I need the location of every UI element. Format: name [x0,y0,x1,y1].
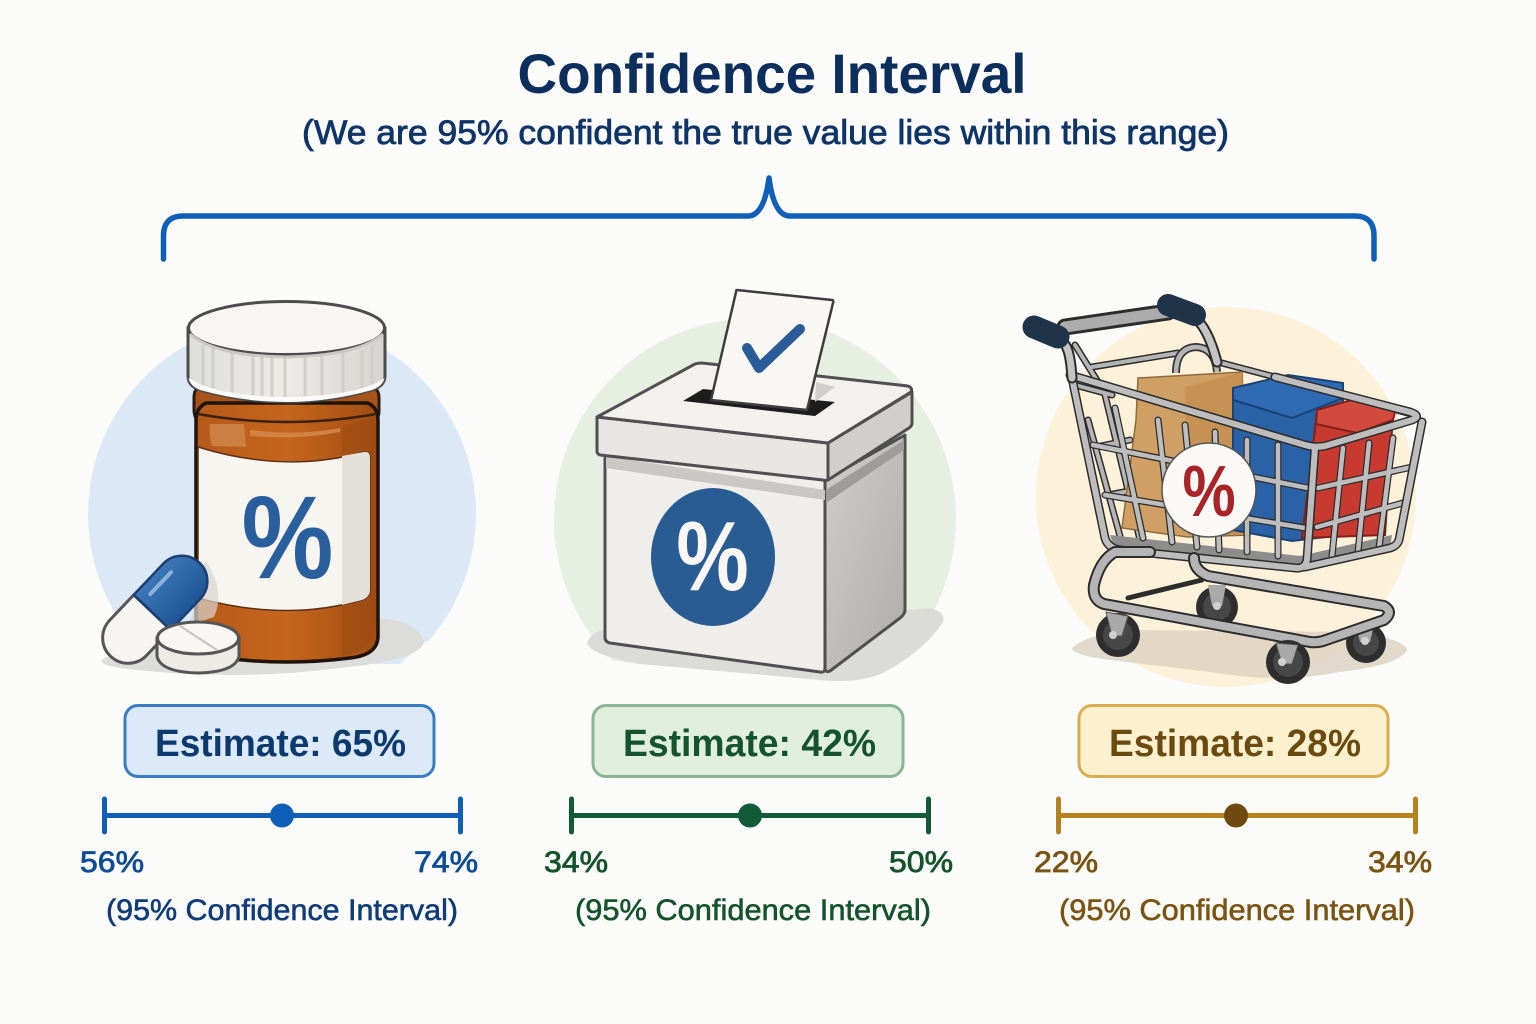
lid front [597,417,828,480]
cart back wires [1075,345,1415,540]
interval scale: medicine: 56% [80,846,144,879]
basket floor [1110,535,1392,567]
panel: medicine example [88,302,476,708]
estimate box: 42%: Estimate: 42% [623,723,876,765]
red box [1302,398,1396,538]
caption: shopping interval: (95% Confidence Interval) [1059,894,1415,927]
far wheel [1346,623,1386,663]
percent badge [1162,443,1256,537]
interval scale: shopping: 34% [1368,846,1432,879]
icon: shopping cart [1034,305,1422,684]
ballot slot [683,389,835,416]
brace spanning all three examples [164,178,1374,259]
ground shadow [102,618,424,675]
percent badge: % [676,502,749,612]
shopping bag [1122,347,1250,537]
icon: capsule [92,545,218,674]
cap [188,302,385,402]
background circle: blue [88,345,476,664]
icon: check mark [747,329,800,368]
caption: medicine interval: (95% Confidence Interval) [106,894,458,927]
estimate box: 28%: Estimate: 28% [1109,723,1361,765]
cart basket rim [1070,375,1422,568]
interval scale: medicine: 74% [414,846,478,879]
background circle: yellow [1036,307,1416,687]
interval scale: shopping: 22% [1034,846,1098,879]
interval scale: election: 34% [544,846,608,879]
title: Confidence Interval [518,42,1026,105]
interval scale: election: 50% [889,846,953,879]
percent badge [651,488,775,626]
box front [605,455,825,672]
panel: election example [554,290,956,720]
estimate box: 65% [125,706,434,776]
ground shadow [587,608,943,681]
blue box [1233,375,1343,541]
ballot paper [711,290,833,410]
cart handle bar [1034,305,1195,337]
lid side [828,392,912,480]
cart lower frame [1094,552,1389,642]
rear wheel [1196,585,1238,628]
lid top [597,363,912,443]
icon: ballot box [597,290,912,672]
caption: election interval: (95% Confidence Interval) [575,894,931,927]
cart basket wires [1093,408,1412,556]
estimate box: 65%: Estimate: 65% [155,723,406,765]
interval scale: medicine [80,799,478,879]
icon: tablet [157,622,239,673]
estimate box: 42% [593,706,903,776]
panel: shopping example [1034,305,1422,687]
box side [825,435,905,672]
percent badge: % [1182,452,1236,532]
subtitle: (We are 95% confident the true value lies within this range) [302,114,1229,152]
front right wheel [1266,640,1310,684]
ground shadow [1072,630,1407,678]
cart handle uprights [1062,318,1217,378]
front left wheel [1096,612,1140,657]
interval scale: election [544,799,953,879]
percent symbol on label: % [242,473,333,604]
background circle: green [554,320,956,664]
interval scale: shopping [1034,799,1432,879]
label [198,447,370,611]
estimate box: 28% [1079,706,1388,776]
icon: medicine bottle [188,302,385,662]
